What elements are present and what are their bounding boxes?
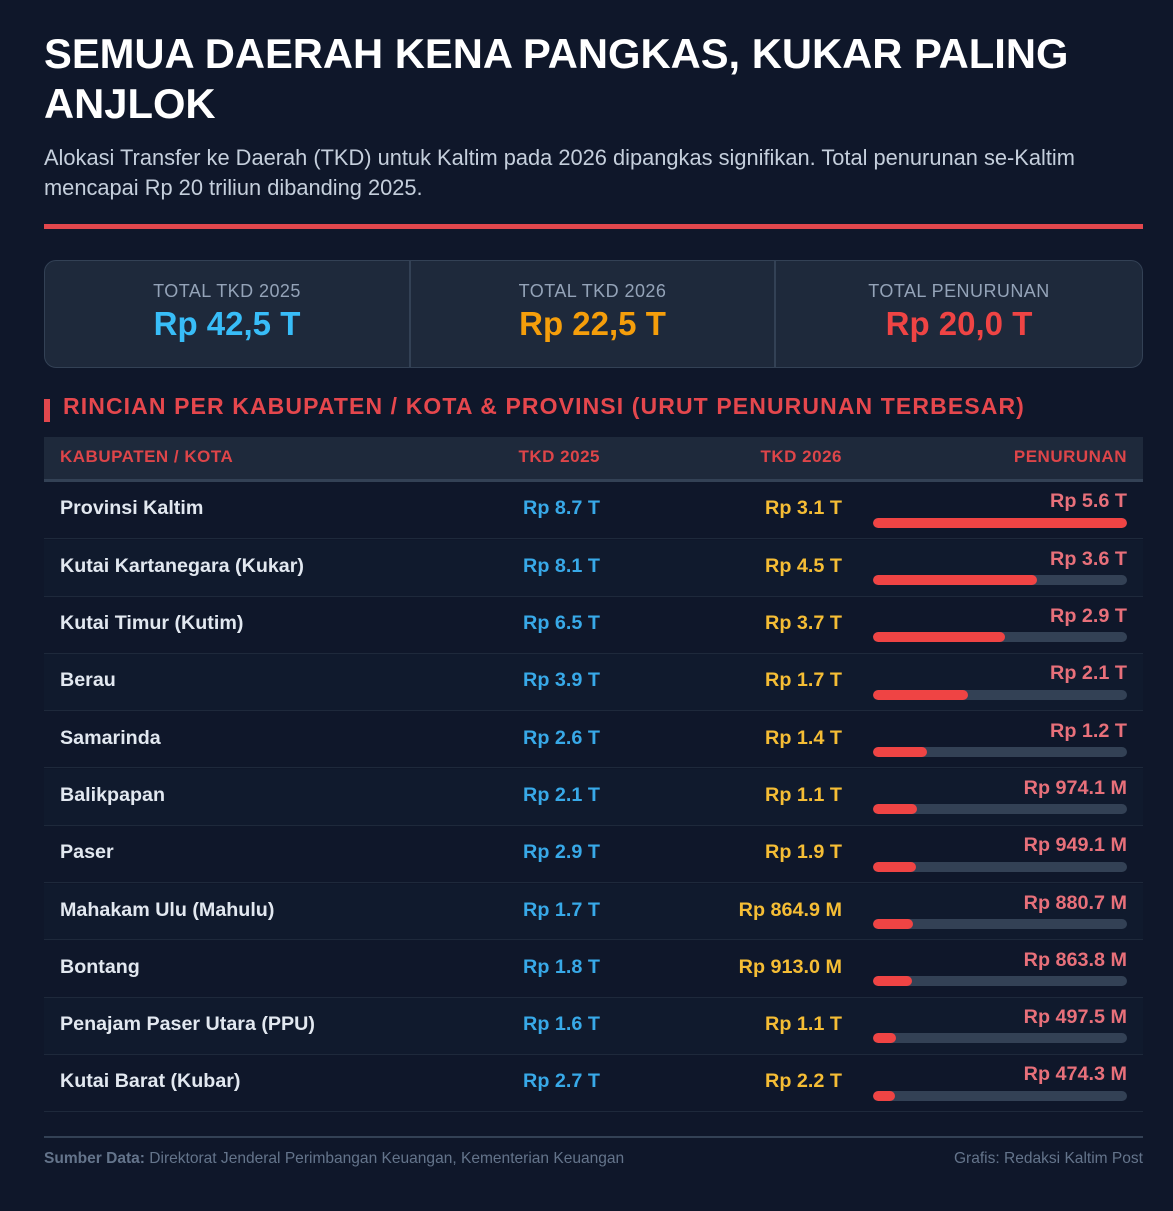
table row: Penajam Paser Utara: Rp 1.6 T [523,1013,600,1035]
table row: Kutai Timur: Rp 2.9 T [1050,605,1127,627]
table row: Penajam Paser Utara: Rp 497.5 M [1024,1006,1127,1028]
table row: Kutai Timur: Kutai Timur (Kutim) [60,612,243,634]
table row: Balikpapan: Rp 2.1 T [523,784,600,806]
card: total penurunan: TOTAL PENURUNAN [868,281,1050,301]
table header [44,437,1143,482]
card: total TKD 2026: Rp 22,5 T [519,305,666,342]
table row: Balikpapan: Rp 974.1 M [1024,777,1127,799]
table row: Berau: Rp 1.7 T [765,669,842,691]
table row: Paser: Paser [60,841,114,863]
table row: Kutai Kartanegara: Kutai Kartanegara (Kukar) [60,555,304,577]
table row: Balikpapan: Balikpapan [60,784,165,806]
table row: Bontang: Rp 913.0 M [739,956,842,978]
table row: Penajam Paser Utara [44,998,1143,1055]
table row: Berau: Rp 3.9 T [523,669,600,691]
table row: Samarinda: Rp 2.6 T [523,727,600,749]
table row: Kutai Kartanegara: Rp 4.5 T [765,555,842,577]
section heading: RINCIAN PER KABUPATEN / KOTA & PROVINSI (URUT PENURUNAN TERBESAR) [63,393,1025,419]
table header: KABUPATEN / KOTA [60,447,233,466]
table row: Balikpapan [44,769,1143,826]
table row: Bontang: Rp 1.8 T [523,956,600,978]
table row: Kutai Timur: Rp 6.5 T [523,612,600,634]
card: total penurunan: Rp 20,0 T [886,305,1032,342]
card: total TKD 2026 [411,261,776,367]
table header: PENURUNAN [1014,447,1127,466]
table row: Provinsi Kaltim: Rp 8.7 T [523,497,600,519]
table row: Paser: Rp 2.9 T [523,841,600,863]
table row: Kutai Kartanegara: Rp 8.1 T [523,555,600,577]
table row: Samarinda: Samarinda [60,727,161,749]
subtitle: Alokasi Transfer ke Daerah (TKD) untuk Kaltim pada 2026 dipangkas signifikan. Total penurunan se-Kaltim [44,145,1075,170]
table row: Provinsi Kaltim: Provinsi Kaltim [60,497,203,519]
table row: Bontang [44,941,1143,998]
table row: Penajam Paser Utara: Penajam Paser Utara (PPU) [60,1013,315,1035]
table row: Samarinda [44,712,1143,768]
table row: Kutai Barat [44,1055,1143,1112]
table row: Kutai Timur [44,597,1143,654]
card: total TKD 2025 [45,261,411,367]
subtitle: mencapai Rp 20 triliun dibanding 2025. [44,175,423,200]
subtitle [44,145,1075,200]
table row: Mahakam Ulu: Rp 864.9 M [739,898,842,920]
title [44,30,1068,127]
card: total TKD 2025: TOTAL TKD 2025 [153,281,301,301]
table header: TKD 2026 [761,447,842,466]
table row: Penajam Paser Utara: Rp 1.1 T [765,1013,842,1035]
card: total penurunan [868,281,1050,342]
table row: Bontang: Bontang [60,956,140,978]
table row: Kutai Kartanegara [44,540,1143,597]
card: total TKD 2026: TOTAL TKD 2026 [519,281,666,301]
table row: Kutai Barat: Kutai Barat (Kubar) [60,1070,240,1092]
table row: Samarinda: Rp 1.4 T [765,727,842,749]
table row: Kutai Barat: Rp 2.7 T [523,1070,600,1092]
source note: Sumber Data: Direktorat Jenderal Perimbangan Keuangan, Kementerian Keuangan [44,1150,624,1167]
table row: Bontang: Rp 863.8 M [1024,949,1127,971]
table row: Kutai Barat: Rp 474.3 M [1024,1063,1127,1085]
table row: Mahakam Ulu: Mahakam Ulu (Mahulu) [60,898,274,920]
table row: Mahakam Ulu: Rp 880.7 M [1024,892,1127,914]
table row: Paser: Rp 1.9 T [765,841,842,863]
footer line [44,1136,1143,1138]
table row: Kutai Timur: Rp 3.7 T [765,612,842,634]
table row: Kutai Barat: Rp 2.2 T [765,1070,842,1092]
table row: Provinsi Kaltim: Rp 3.1 T [765,497,842,519]
table header: TKD 2025 [519,447,600,466]
card: total TKD 2025: Rp 42,5 T [154,305,300,342]
table row: Kutai Kartanegara: Rp 3.6 T [1050,548,1127,570]
table row: Mahakam Ulu: Rp 1.7 T [523,898,600,920]
table row: Paser: Rp 949.1 M [1024,834,1127,856]
table row: Berau [44,654,1143,711]
panel: summary cards [44,260,1143,368]
table row: Berau: Rp 2.1 T [1050,662,1127,684]
table row: Provinsi Kaltim: Rp 5.6 T [1050,490,1127,512]
title: SEMUA DAERAH KENA PANGKAS, KUKAR PALING [44,30,1068,77]
table row: Mahakam Ulu [44,884,1143,940]
table row: Paser [44,826,1143,883]
red divider [44,224,1143,229]
table row: Provinsi Kaltim [44,482,1143,539]
title: ANJLOK [44,80,216,127]
table row: Samarinda: Rp 1.2 T [1050,720,1127,742]
table row: Berau: Berau [60,669,116,691]
table row: Balikpapan: Rp 1.1 T [765,784,842,806]
credit: Grafis: Redaksi Kaltim Post [954,1150,1143,1167]
